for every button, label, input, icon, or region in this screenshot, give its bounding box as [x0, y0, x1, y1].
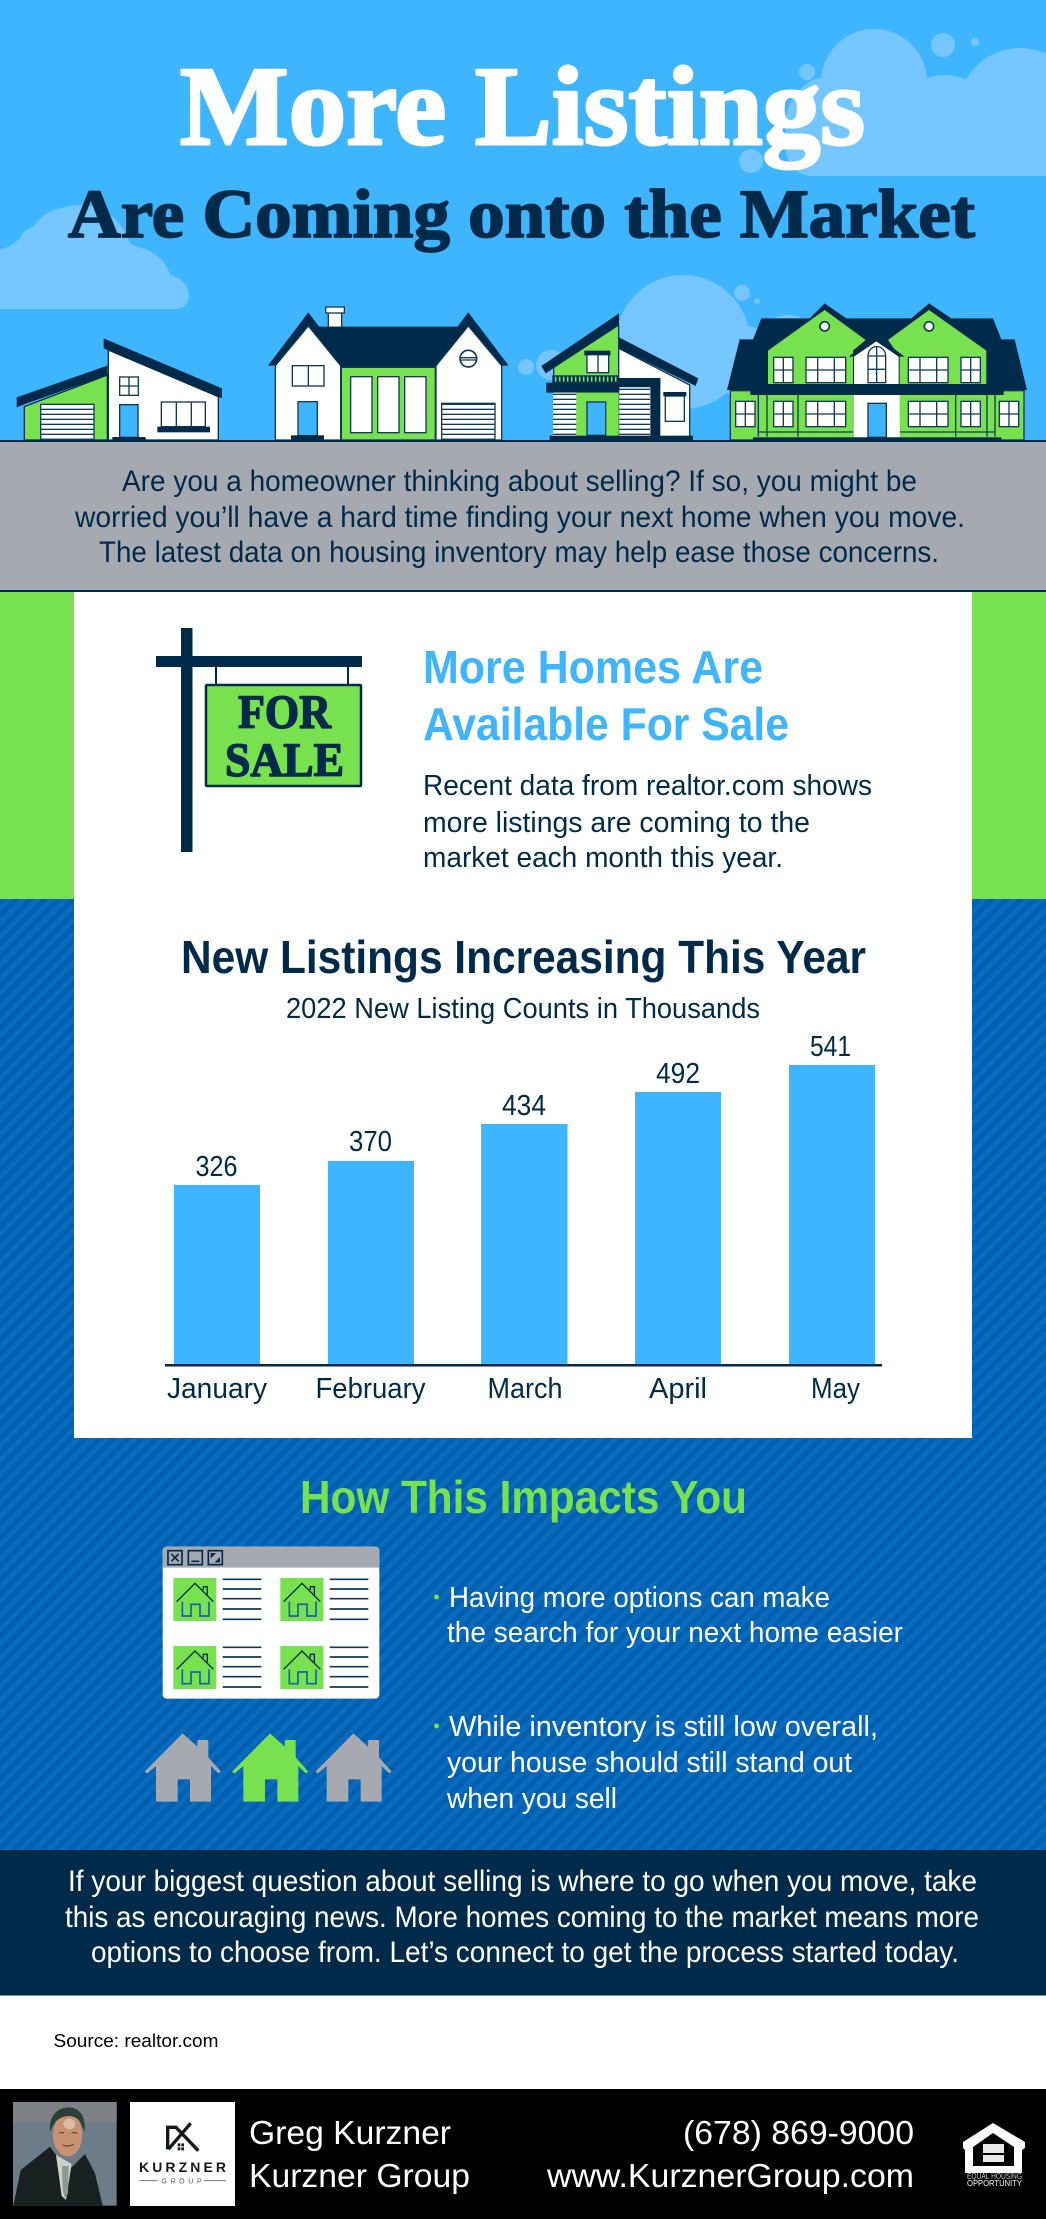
bar: February 370: February	[316, 1373, 426, 1405]
text block: bullet two: While inventory is still low overall,	[449, 1711, 878, 1743]
bar: February 370: 370	[349, 1126, 392, 1158]
bar: May 541: 541	[810, 1031, 851, 1063]
agent name: Greg Kurzner	[249, 2114, 451, 2151]
cloud: top right	[739, 29, 1046, 176]
panel: closing navy band: If your biggest question about selling is where to go when you move, take	[68, 1865, 977, 1898]
source note: Source: realtor.com	[54, 2030, 218, 2051]
bar: January 326	[167, 1151, 267, 1405]
panel: intro grey band	[0, 440, 1046, 592]
bar: March 434: 434	[502, 1090, 546, 1122]
panel: intro grey band: Are you a homeowner thinking about selling? If so, you might be	[122, 465, 917, 498]
agent photo	[13, 2102, 117, 2206]
icon: listings browser window	[163, 1547, 379, 1699]
text block: recent data	[423, 770, 872, 874]
house 2	[268, 307, 509, 440]
listing thumbnail	[280, 1646, 368, 1689]
listing thumbnail	[280, 1578, 368, 1621]
contact details: www.KurznerGroup.com	[546, 2157, 914, 2194]
bar: March 434	[481, 1090, 568, 1405]
listing thumbnail	[173, 1646, 261, 1689]
bar: January 326: 326	[196, 1151, 238, 1183]
bar: May 541	[789, 1031, 875, 1405]
icon: for sale sign: FOR	[238, 686, 332, 739]
chart heading: New Listings Increasing This Year	[181, 931, 866, 983]
subtitle: Are Coming onto the Market: Are Coming onto the Market	[68, 176, 975, 252]
listing thumbnail	[173, 1578, 261, 1621]
panel: closing navy band: this as encouraging news. More homes coming to the market means more	[65, 1901, 979, 1934]
blue striped background	[0, 899, 1046, 1850]
text block: bullet one: Having more options can make	[449, 1582, 830, 1614]
sky background	[0, 0, 1046, 441]
bar: April 492: 492	[656, 1058, 700, 1090]
bar: March 434: March	[488, 1373, 562, 1405]
contact details: (678) 869-9000	[683, 2114, 914, 2151]
bar chart	[165, 1031, 882, 1405]
text block: bullet one: the search for your next home easier	[447, 1617, 903, 1649]
icon: for sale sign: SALE	[225, 734, 344, 787]
icon: equal housing opportunity: OPPORTUNITY	[967, 2179, 1023, 2188]
agent name: Kurzner Group	[249, 2157, 470, 2194]
heading: More Homes Are Available For Sale: Available For Sale	[423, 698, 789, 750]
panel: intro grey band: worried you’ll have a hard time finding your next home when you move.	[74, 501, 965, 534]
panel: footer	[0, 2089, 1046, 2219]
company logo	[130, 2102, 235, 2206]
company logo: GROUP	[161, 2178, 202, 2185]
heading: How This Impacts You: How This Impacts You	[300, 1471, 747, 1523]
heading: More Homes Are Available For Sale: More Homes Are	[423, 641, 763, 693]
panel: closing navy band	[0, 1850, 1046, 1996]
icon: equal housing opportunity	[963, 2123, 1025, 2188]
bar: April 492: April	[649, 1373, 707, 1405]
chart subtitle: 2022 New Listing Counts in Thousands	[286, 993, 760, 1025]
title: More Listings: More Listings	[180, 45, 865, 169]
text block: recent data: more listings are coming to the	[423, 807, 810, 839]
text block: bullet two	[434, 1711, 878, 1815]
house 3	[541, 313, 698, 441]
bar: February 370	[316, 1126, 426, 1405]
panel: white card	[74, 592, 972, 1438]
agent name	[249, 2114, 470, 2194]
bar: April 492	[635, 1058, 721, 1405]
house 4	[727, 303, 1027, 441]
bar: January 326: January	[167, 1373, 267, 1405]
panel: closing navy band: options to choose from. Let’s connect to get the process started today.	[91, 1936, 959, 1969]
text block: bullet two: your house should still stand out	[447, 1747, 852, 1779]
house 1	[17, 338, 222, 440]
icon: three houses	[145, 1733, 392, 1802]
bar: May 541: May	[811, 1373, 860, 1405]
text block: bullet two: when you sell	[446, 1783, 617, 1815]
text block: recent data: market each month this year.	[423, 842, 783, 874]
text block: recent data: Recent data from realtor.com shows	[423, 770, 872, 802]
panel: intro grey band: The latest data on housing inventory may help ease those concerns.	[99, 536, 939, 569]
text block: bullet one	[434, 1582, 903, 1649]
icon: for sale sign	[156, 628, 362, 852]
icon: equal housing opportunity: EQUAL HOUSING	[967, 2172, 1022, 2181]
cloud: middle	[518, 275, 818, 409]
green side background	[0, 592, 1046, 899]
contact details	[546, 2114, 914, 2194]
heading: More Homes Are Available For Sale	[423, 641, 789, 750]
cloud: left	[0, 205, 189, 309]
company logo: KURZNER	[139, 2159, 226, 2175]
